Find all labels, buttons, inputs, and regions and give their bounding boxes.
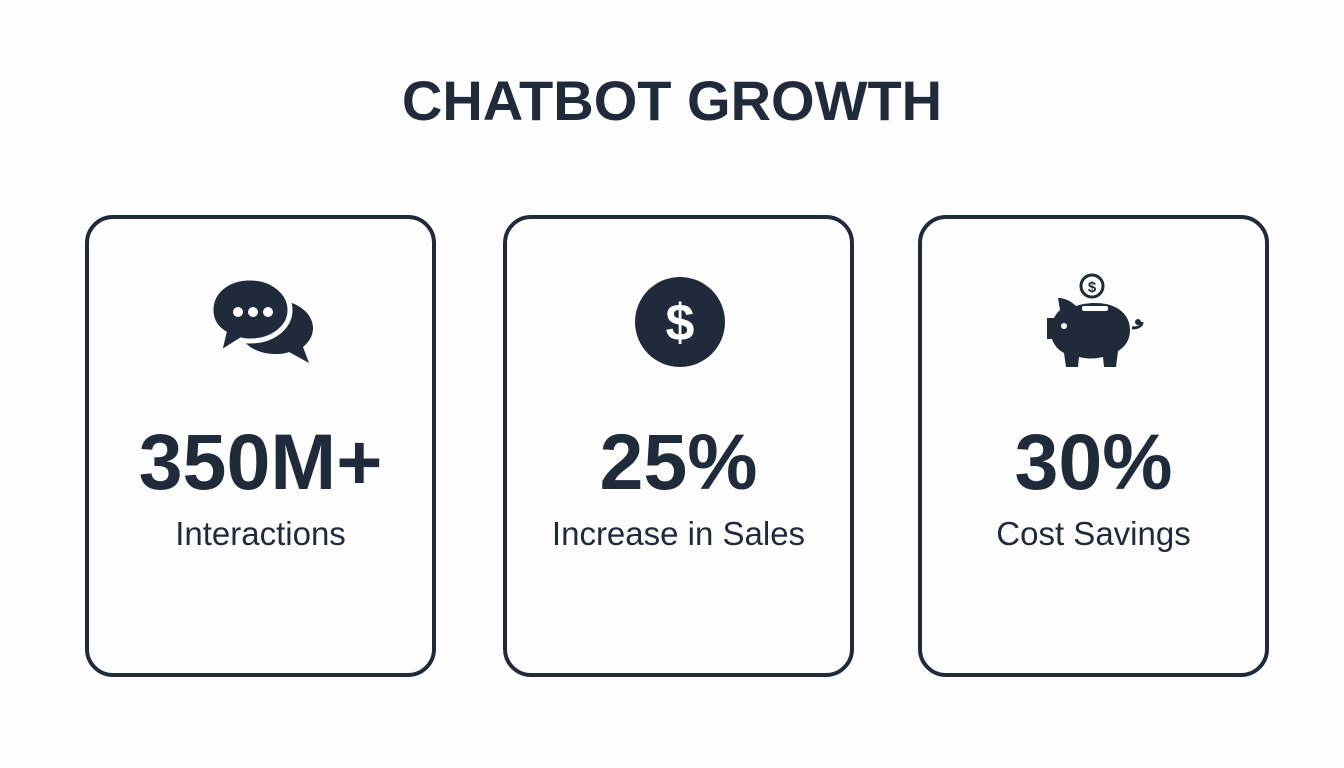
label: interactions: Interactions <box>175 515 346 552</box>
panel: sales <box>503 215 854 677</box>
label: sales: Increase in Sales <box>552 515 805 552</box>
stat: 350M+: 350M+ <box>139 417 382 506</box>
stat: 30%: 30% <box>1014 417 1173 506</box>
icon: dollar: $ <box>666 294 695 352</box>
title: CHATBOT GROWTH <box>402 69 942 132</box>
stat: 25%: 25% <box>599 417 758 506</box>
label: savings: Cost Savings <box>996 515 1191 552</box>
icon: chat bubbles <box>214 280 313 363</box>
panel: savings <box>918 215 1269 677</box>
icon: piggy bank: $ <box>1088 279 1097 296</box>
panel: interactions <box>85 215 436 677</box>
icon: dollar <box>635 277 725 367</box>
icon: piggy bank <box>1047 274 1144 367</box>
